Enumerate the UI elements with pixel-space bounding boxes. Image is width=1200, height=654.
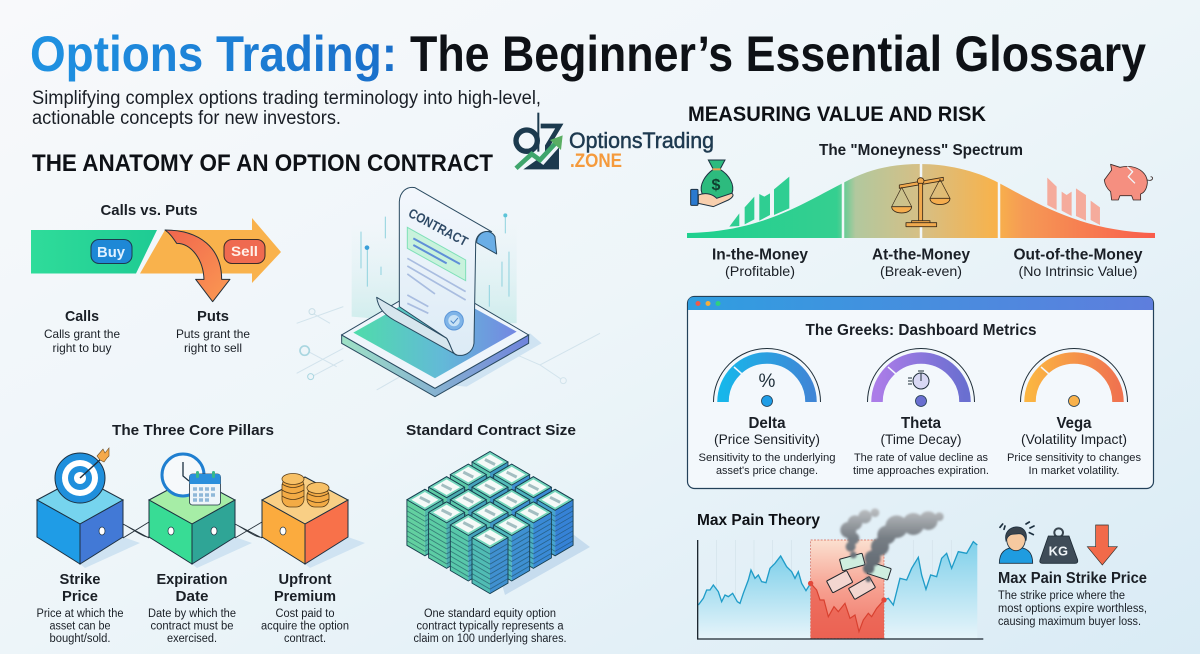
blue price lines	[698, 542, 977, 605]
sell pill: Sell	[231, 243, 258, 259]
panel: standard contract size	[406, 422, 590, 645]
text: theta: time approaches expiration.	[853, 465, 989, 477]
icon: money bag in hand: $	[712, 177, 721, 194]
window header bar	[688, 297, 1153, 310]
bell curve	[687, 164, 1155, 238]
subtitle	[32, 88, 541, 129]
label: in the money: (Profitable)	[725, 263, 795, 279]
text: delta: Delta	[748, 415, 786, 432]
logo	[516, 113, 714, 172]
text: standard contract description: contract typically represents a	[416, 620, 564, 632]
buy pill	[91, 240, 132, 264]
icon: down arrow	[1087, 525, 1117, 565]
text: upfront premium: contract.	[284, 633, 326, 645]
bars behind curve: rising	[729, 177, 789, 227]
line chart	[698, 508, 983, 639]
axes	[698, 540, 983, 639]
panel: calls vs puts	[31, 202, 281, 355]
text: upfront premium: Cost paid to	[276, 608, 334, 620]
dashboard window	[688, 296, 1154, 488]
logo text: OptionsTrading	[569, 128, 714, 153]
panel: greeks dashboard	[688, 296, 1154, 488]
text: expiration date	[148, 571, 236, 645]
text: strike price: bought/sold.	[50, 633, 110, 645]
text: expiration date: Expiration	[156, 571, 228, 588]
text: delta	[698, 415, 836, 477]
panel: moneyness spectrum	[687, 142, 1155, 279]
logo mark	[516, 113, 563, 169]
logo: .ZONE	[570, 151, 622, 172]
text: expiration date: contract must be	[150, 620, 234, 632]
gauge: vega	[1020, 348, 1128, 406]
puts text	[176, 308, 250, 355]
illustration: contract on platform: CONTRACT	[406, 205, 470, 249]
heading: moneyness spectrum: The "Moneyness" Spectrum	[819, 142, 1023, 159]
label: out of the money: Out-of-the-Money	[1014, 246, 1143, 264]
curve dividers	[843, 163, 999, 239]
gauge: delta	[714, 348, 820, 406]
label: at the money	[872, 246, 970, 279]
text: strike price: Price at which the	[36, 608, 124, 620]
text: theta: The rate of value decline as	[854, 452, 988, 464]
text: strike price: Strike	[60, 571, 100, 588]
text: expiration date: exercised.	[167, 633, 217, 645]
text: vega: In market volatility.	[1028, 465, 1120, 477]
red loss zone	[811, 540, 884, 638]
gauge: theta	[868, 348, 974, 406]
icon: kg weight: KG	[1049, 544, 1068, 559]
label: in the money: In-the-Money	[712, 246, 808, 264]
text: theta: (Time Decay)	[880, 432, 962, 447]
heading: anatomy of an option contract: THE ANATOMY OF AN OPTION CONTRACT	[32, 150, 493, 177]
subtitle: actionable concepts for new investors.	[32, 108, 341, 129]
text: strike price: Price	[62, 588, 98, 605]
text: upfront premium: acquire the option	[261, 620, 349, 632]
curved down arrow	[165, 230, 230, 302]
puts text: right to sell	[184, 341, 242, 355]
illustration: contract on platform	[297, 187, 600, 397]
text: max pain strike price: causing maximum buyer loss.	[998, 616, 1141, 628]
calls text: Calls	[65, 308, 99, 325]
text: delta: asset's price change.	[716, 465, 818, 477]
icon: target with arrow	[55, 448, 109, 503]
smoke plumes	[840, 508, 944, 582]
blue area right	[884, 542, 977, 638]
blue area left	[698, 556, 811, 638]
icon: broken piggy bank	[1104, 164, 1153, 200]
calls text	[44, 308, 120, 355]
text: strike price: asset can be	[50, 620, 110, 632]
green call band	[31, 230, 157, 274]
text: standard contract description: claim on 100 underlying shares.	[414, 633, 566, 645]
text: theta: Theta	[901, 415, 941, 432]
label: at the money: (Break-even)	[880, 263, 962, 279]
text: standard contract description: One standard equity option	[424, 608, 556, 620]
text: vega: Vega	[1056, 415, 1092, 432]
subtitle: Simplifying complex options trading terminology into high-level,	[32, 88, 541, 109]
text: delta: (Price Sensitivity)	[714, 432, 820, 447]
text: upfront premium: Upfront	[278, 571, 332, 588]
text: max pain strike price: most options expire worthless,	[998, 603, 1147, 615]
puts text: Puts grant the	[176, 327, 250, 341]
text: vega	[1007, 415, 1142, 477]
text: delta: Sensitivity to the underlying	[698, 452, 836, 464]
puts text: Puts	[197, 308, 229, 325]
text: upfront premium: Premium	[274, 588, 336, 605]
text: upfront premium	[261, 571, 349, 645]
text: expiration date: Date by which the	[148, 608, 236, 620]
heading: max pain theory: Max Pain Theory	[697, 512, 820, 529]
heading: the greeks: The Greeks: Dashboard Metrics	[806, 322, 1037, 339]
text: max pain strike price	[998, 570, 1147, 628]
illustration: stacks of share certificates	[407, 452, 590, 595]
heading: standard contract size: Standard Contract Size	[406, 422, 576, 439]
text: vega: Price sensitivity to changes	[1007, 452, 1142, 464]
calls text: right to buy	[52, 341, 112, 355]
label: out of the money	[1014, 246, 1143, 279]
label: at the money: At-the-Money	[872, 246, 970, 264]
icon: balance scale	[892, 177, 950, 227]
sell pill	[224, 240, 265, 264]
text: max pain strike price: The strike price where the	[998, 590, 1125, 602]
buy pill: Buy	[97, 244, 126, 261]
heading: three core pillars: The Three Core Pillars	[112, 422, 274, 439]
heading: measuring value and risk: MEASURING VALUE AND RISK	[688, 103, 986, 126]
pillar: upfront premium cube	[262, 477, 348, 564]
pillar: expiration date cube	[149, 477, 235, 564]
text: expiration date: Date	[176, 588, 208, 605]
label: out of the money: (No Intrinsic Value)	[1018, 263, 1138, 279]
icon: kg weight	[1040, 528, 1078, 563]
icon: percent: %	[759, 371, 776, 392]
panel: max pain theory	[697, 508, 1147, 639]
label: in the money	[712, 246, 808, 279]
calls text: Calls grant the	[44, 327, 120, 341]
bars behind curve: falling	[1047, 178, 1100, 225]
text: standard contract description	[414, 608, 566, 645]
burning banknotes	[827, 553, 891, 599]
title: Options Trading:	[30, 26, 397, 82]
text: theta	[853, 415, 989, 477]
text: max pain strike price: Max Pain Strike Price	[998, 570, 1147, 587]
orange put arrow	[140, 218, 281, 283]
text: vega: (Volatility Impact)	[1021, 432, 1127, 447]
pillar: strike price cube	[37, 477, 123, 564]
icon: stopwatch	[908, 371, 929, 389]
title	[30, 26, 1146, 82]
icon: coin stacks	[282, 474, 329, 507]
shadows and connectors	[80, 522, 365, 568]
icon: clock and calendar	[162, 454, 220, 505]
text: strike price	[36, 571, 124, 645]
icon: money bag in hand	[691, 160, 733, 207]
panel: three core pillars	[36, 422, 365, 645]
heading: calls vs puts: Calls vs. Puts	[100, 202, 198, 219]
icon: worried person	[999, 522, 1034, 563]
